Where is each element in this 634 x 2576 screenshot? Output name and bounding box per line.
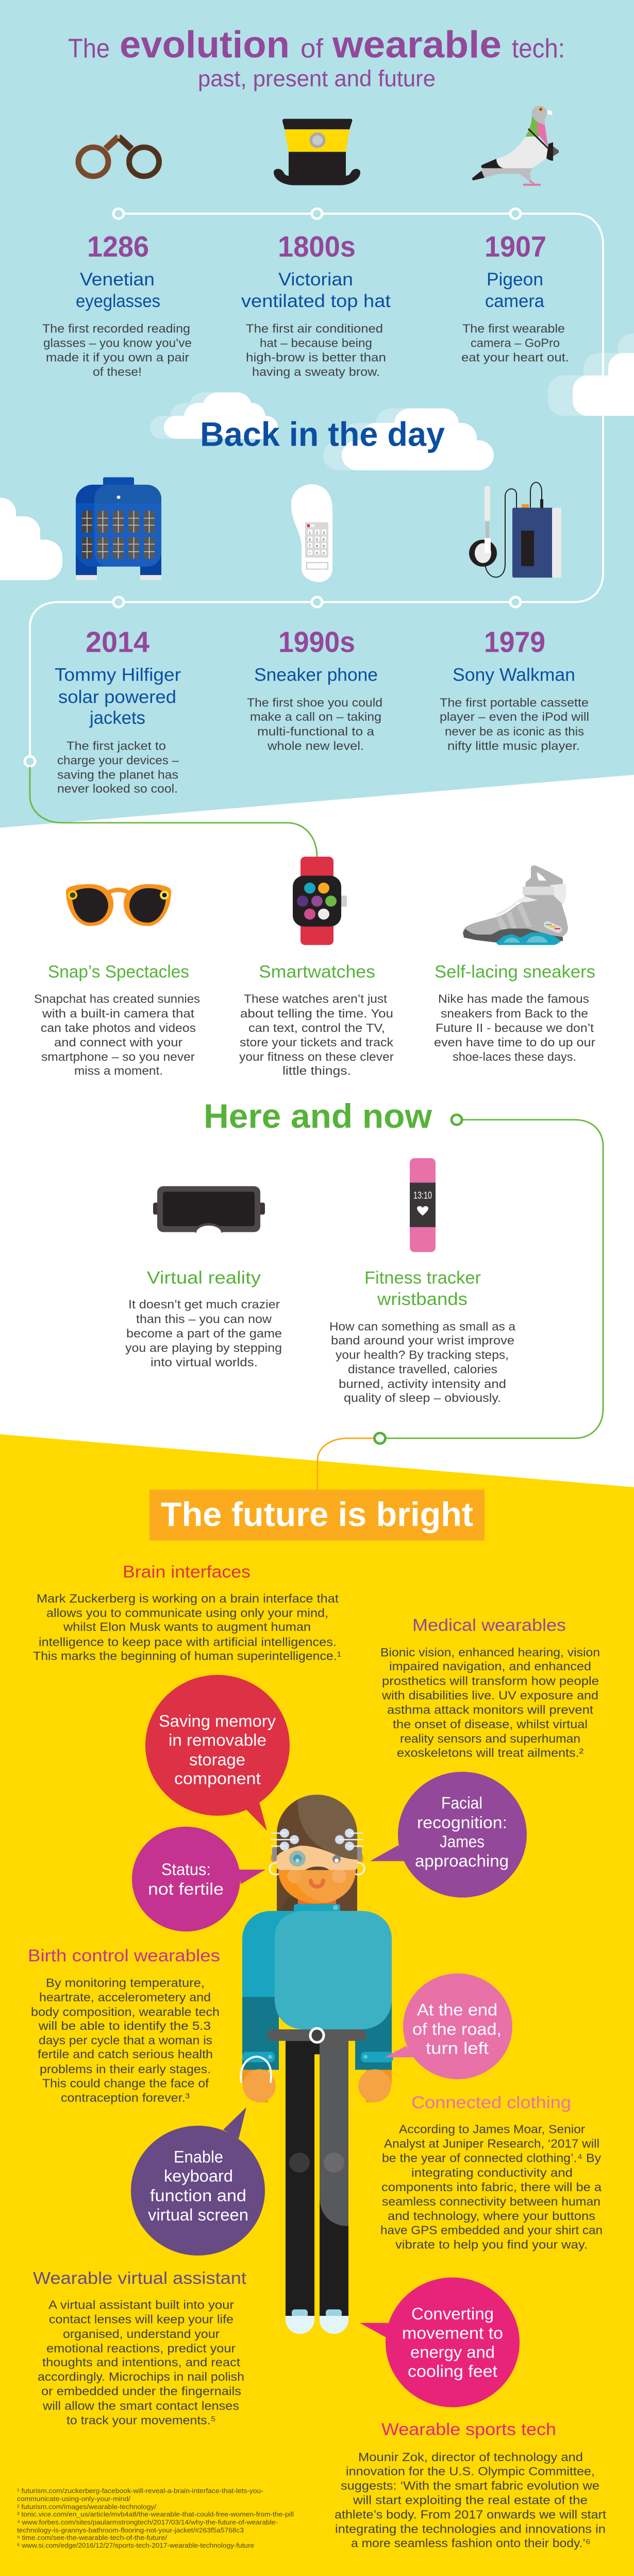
present item: Fitness tracker wristbands: wristbands [377,1290,468,1309]
speech bubble: facial recognition [370,1772,527,1897]
present item: Fitness tracker wristbands [329,1268,516,1405]
text block: Connected clothing: have GPS embedded and your shirt can [380,2224,603,2238]
timeline item: 1990s Sneaker phone: make a call on – taking [250,711,381,724]
timeline item: 1907 Pigeon camera [461,231,569,364]
text block: Wearable sports tech: suggests: ‘With the smart fabric evolution we [341,2480,599,2493]
present item: Fitness tracker wristbands: distance travelled, calories [348,1363,497,1377]
footnotes: technology-is-grannys-bathroom-flooring-not-your-jacket/#263f5a5768c3 [17,2527,244,2534]
speech bubble: facial recognition: Facial [441,1794,482,1812]
footnotes: ⁴ www.forbes.com/sites/paularmstrongtech/2017/03/14/why-the-future-of-wearable- [17,2518,278,2526]
present item: Fitness tracker wristbands: Fitness tracker [364,1268,481,1287]
timeline item: 1979 Sony Walkman: never be as iconic as this [445,725,584,738]
speech bubble: turn left: of the road, [412,2020,502,2039]
icon: Venetian eyeglasses [78,136,159,176]
present item: Virtual reality [125,1268,282,1369]
text block: Birth control wearables: will be able to identify the 5.3 [38,2020,211,2033]
timeline item: 1990s Sneaker phone: 1990s [278,626,355,658]
present item: Virtual reality: become a part of the game [126,1327,282,1341]
timeline item: 2014 Tommy Hilfiger jackets: charge your devices – [57,754,179,767]
text block: Medical wearables: Bionic vision, enhanced hearing, vision [380,1646,600,1659]
timeline item: 1800s Victorian ventilated top hat: The first air conditioned [246,323,383,335]
speech bubble: turn left: At the end [417,2001,497,2019]
timeline item: 1286 Venetian eyeglasses: glasses – you know you’ve [43,337,192,350]
hair [277,1795,357,1911]
speech bubble: keyboard function: function and [150,2187,246,2205]
timeline item: 1800s Victorian ventilated top hat [241,231,391,379]
heading: Here and now: Here and now [204,1097,432,1136]
icon: sneaker phone [291,484,332,582]
speech bubble: converting movement: cooling feet [408,2362,497,2380]
timeline item: 1286 Venetian eyeglasses: eyeglasses [76,291,160,311]
text block: Wearable virtual assistant [33,2269,247,2427]
text block: Wearable virtual assistant: A virtual assistant built into your [48,2299,234,2312]
text block: Wearable sports tech: will start exploiting the real estate of the [353,2494,588,2507]
text block: Wearable virtual assistant: will allow the smart contact lenses [42,2400,239,2413]
icon: Sony Walkman [469,482,561,578]
text block: Connected clothing: seamless connectivity between human [382,2195,600,2209]
icon: sneaker phone: 8 [316,545,318,548]
present item: Virtual reality: It doesn’t get much crazier [128,1298,280,1312]
present item: Smartwatches: your fitness on these clever [239,1050,394,1064]
present item: Snap's Spectacles: can take photos and videos [41,1022,196,1035]
timeline item: 1979 Sony Walkman: Sony Walkman [453,665,575,685]
text block: Wearable virtual assistant: to track your movements.⁵ [66,2414,216,2427]
present item: Self-lacing sneakers: Self-lacing sneakers [435,962,595,981]
text block: Medical wearables: with disabilities live. UV exposure and [381,1689,598,1702]
timeline item: 1979 Sony Walkman: player – even the iPod will [440,711,589,724]
green timeline: present [386,1115,603,1438]
present item: Smartwatches: can text, control the TV, [248,1022,385,1035]
text block: Birth control wearables: Birth control wearables [28,1947,220,1965]
timeline item: 1800s Victorian ventilated top hat: 1800s [278,231,356,263]
present item: Snap's Spectacles: and connect with your [54,1036,182,1049]
present item: Virtual reality: into virtual worlds. [151,1356,258,1369]
timeline item: 2014 Tommy Hilfiger jackets: saving the planet has [57,769,178,782]
present item: Self-lacing sneakers: sneakers from Back to the [441,1007,588,1021]
present item: Fitness tracker wristbands: quality of sleep – obviously. [344,1392,501,1405]
background: sky blue past section [0,0,634,828]
speech bubble: converting movement: movement to [402,2324,503,2343]
timeline item: 1979 Sony Walkman: nifty little music player. [447,740,580,753]
icon: solar powered jacket [76,477,161,580]
timeline item: 1800s Victorian ventilated top hat: having a sweaty brow. [252,366,380,379]
ears, earpieces and earrings [270,1847,364,1875]
orange timeline: present to future [318,1438,374,1489]
text block: Wearable sports tech: a more seamless fashion onto their body.’⁶ [351,2537,591,2550]
icon: fitness tracker wristband: 13:10 [413,1190,432,1201]
text block: Brain interfaces: This marks the beginning of human superintelligence.¹ [33,1650,341,1663]
timeline item: 1979 Sony Walkman: The first portable cassette [440,697,589,710]
text block: Wearable sports tech: athlete’s body. From 2017 onwards we will start [335,2509,606,2521]
icon: sneaker phone: * [309,552,311,555]
icon: fitness tracker wristband [410,1158,436,1252]
timeline item: 2014 Tommy Hilfiger jackets: solar powered [58,687,176,707]
icon: Snap's Spectacles [66,884,171,926]
text block: Medical wearables [380,1616,600,1760]
text block: Connected clothing: components into fabric, there will be a [381,2181,602,2194]
cloud: right of first row [548,333,634,416]
present item: Self-lacing sneakers: even have time to do up our [434,1036,595,1049]
timeline item: 1907 Pigeon camera: The first wearable [462,323,565,335]
timeline item: 1990s Sneaker phone: The first shoe you could [247,697,382,710]
cloud: behind heading right [323,409,494,470]
present item: Virtual reality: you are playing by stepping [125,1342,282,1355]
timeline item: 2014 Tommy Hilfiger jackets: 2014 [86,626,149,658]
text block: Connected clothing: Analyst at Juniper Research, ‘2017 will [384,2138,599,2151]
cloud: behind heading left [150,393,278,439]
icon: sneaker phone: 9 [323,545,325,548]
speech bubble: keyboard function: keyboard [164,2167,233,2185]
text block: Birth control wearables [28,1947,220,2105]
trousers [286,2041,348,2316]
speech bubble: status not fertile: not fertile [148,1880,224,1898]
text block: Birth control wearables: body composition, wearable tech [31,2006,220,2019]
present item: Fitness tracker wristbands: How can something as small as a [329,1320,516,1333]
present item: Smartwatches [239,962,394,1078]
present item: Smartwatches: store your tickets and track [240,1036,393,1049]
hands with bracelet [241,2057,392,2102]
speech bubble: status not fertile: Status: [161,1860,211,1878]
timeline item: 1907 Pigeon camera: camera – GoPro [471,337,560,350]
cooling shoes [286,2310,348,2334]
heading: Back in the day: Back in the day [200,415,445,453]
footnotes [17,2487,294,2549]
speech bubble: converting movement: Converting [411,2304,494,2323]
timeline item: 2014 Tommy Hilfiger jackets: jackets [89,708,145,728]
icon: sneaker phone: 6 [323,538,325,541]
green timeline: past to present [30,767,317,857]
text block: Medical wearables: impaired navigation, and enhanced [389,1660,591,1673]
speech bubble: saving memory: storage [189,1751,245,1769]
icon: sneaker phone: 1 [309,531,311,535]
text block: Brain interfaces: Mark Zuckerberg is working on a brain interface that [37,1592,339,1605]
present item: Snap's Spectacles: smartphone – so you never [41,1050,195,1064]
icon: smartwatch [293,857,347,945]
text block: Connected clothing [380,2094,603,2251]
cloud: left edge [0,498,62,580]
footnotes: ¹ futurism.com/zuckerberg-facebook-will-reveal-a-brain-interface-that-lets-you- [17,2487,263,2495]
text block: Wearable virtual assistant: accordingly. Microchips in nail polish [38,2370,244,2384]
speech bubble: status not fertile [132,1827,265,1931]
timeline item: 2014 Tommy Hilfiger jackets: Tommy Hilfiger [55,665,181,685]
timeline item: 1907 Pigeon camera: Pigeon [487,269,543,290]
speech bubble: facial recognition: recognition: [417,1814,507,1832]
present item: Self-lacing sneakers [434,962,595,1064]
text block: Connected clothing: integrating conductivity and [411,2166,573,2180]
text block: Brain interfaces: allows you to communicate using only your mind, [46,1607,328,1620]
timeline item: 1979 Sony Walkman: 1979 [484,626,545,658]
text block: Birth control wearables: heartrate, accelerometery and [39,1991,211,2005]
timeline node: present to future [374,1433,386,1444]
speech bubble: facial recognition: James [440,1833,485,1851]
text block: Connected clothing: vibrate to help you find your way. [395,2239,588,2251]
footnotes: communicate-using-only-your-mind/ [17,2495,130,2503]
timeline item: 1286 Venetian eyeglasses: The first recorded reading [42,323,190,335]
timeline item: 2014 Tommy Hilfiger jackets: The first jacket to [66,740,166,753]
footnotes: ⁵ time.com/see-the-wearable-tech-of-the-future/ [17,2534,167,2541]
icon: VR headset [153,1186,265,1244]
speech bubble: saving memory: in removable [169,1731,266,1749]
present item: Smartwatches: These watches aren’t just [244,993,387,1006]
icon: sneaker phone: 3 [323,531,325,535]
present item: Self-lacing sneakers: shoe-laces these days. [453,1050,576,1064]
present item: Virtual reality: than this – you can now [136,1313,272,1326]
timeline item: 1286 Venetian eyeglasses: of these! [93,366,142,379]
timeline item: 1800s Victorian ventilated top hat: Victorian [278,269,353,290]
timeline item: 1286 Venetian eyeglasses: Venetian [80,269,155,290]
timeline item: 2014 Tommy Hilfiger jackets: never looked so cool. [57,783,178,796]
timeline item: 1907 Pigeon camera: eat your heart out. [461,351,569,364]
present item: Smartwatches: little things. [282,1065,351,1078]
speech bubble: converting movement [360,2278,520,2407]
text block: Birth control wearables: days per cycle that a woman is [39,2034,212,2047]
timeline item: 1907 Pigeon camera: camera [485,291,544,311]
present item: Fitness tracker wristbands: your health? By tracking steps, [336,1349,509,1362]
heading: The future is bright: The future is bright [161,1496,473,1534]
timeline item: 1990s Sneaker phone: Sneaker phone [254,665,378,685]
title: evolution [120,23,290,65]
present item: Snap's Spectacles [34,962,200,1078]
timeline item: 1286 Venetian eyeglasses [42,231,192,379]
present item: Snap's Spectacles: miss a moment. [74,1065,163,1078]
title: of [301,33,323,63]
speech bubble: saving memory [145,1675,290,1831]
icon: self-lacing sneaker [463,866,568,945]
icon: sneaker phone: 5 [316,538,318,541]
speech bubble: saving memory: Saving memory [159,1712,276,1731]
text block: Medical wearables: Medical wearables [412,1616,566,1635]
text block: Medical wearables: asthma attack monitors will prevent [387,1704,593,1717]
footnotes: ² futurism.com/images/wearable-technology/ [17,2503,156,2511]
present item: Self-lacing sneakers: Nike has made the famous [438,993,589,1006]
speech bubble: facial recognition: approaching [415,1852,509,1870]
jumper [242,1904,393,2070]
text block: Connected clothing: According to James Moar, Senior [399,2123,585,2136]
title: The [68,33,110,63]
icon: sneaker phone: 4 [309,538,311,541]
text block: Wearable sports tech: Mounir Zok, director of technology and [358,2451,583,2464]
text block: Brain interfaces: Brain interfaces [123,1563,251,1582]
text block: Wearable sports tech: Wearable sports tech [381,2420,556,2439]
face with visor [277,1845,357,1906]
speech bubble: converting movement: energy and [410,2343,495,2361]
timeline item: 1800s Victorian ventilated top hat: high-brow is better than [246,351,386,364]
icon: sneaker phone: 7 [309,545,311,548]
belt with buckle [267,2028,366,2042]
title [68,23,565,91]
title: tech: [512,33,565,63]
timeline item: 1990s Sneaker phone [247,626,382,753]
icon: sneaker phone: # [323,552,325,555]
speech bubble: keyboard function: virtual screen [148,2206,248,2224]
text block: Connected clothing: be the year of connected clothing’.⁴ By [382,2152,601,2165]
text block: Connected clothing: Connected clothing [411,2094,571,2112]
text block: Medical wearables: reality sensors and superhuman [400,1733,580,1746]
text block: Wearable sports tech [335,2420,606,2550]
present item: Virtual reality: Virtual reality [147,1268,261,1287]
title: past, present and future [198,65,436,91]
text block: Birth control wearables: fertile and catch serious health [38,2048,213,2061]
text block: Birth control wearables: By monitoring temperature, [46,1977,205,1990]
text block: Wearable virtual assistant: emotional reactions, predict your [46,2342,236,2355]
text block: Birth control wearables: This could change the face of [42,2077,209,2090]
speech bubble: keyboard function: Enable [174,2148,223,2166]
timeline item: 1800s Victorian ventilated top hat: hat – because being [260,337,372,350]
timeline item: 1907 Pigeon camera: 1907 [485,231,546,263]
white timeline: past [25,209,603,766]
present item: Self-lacing sneakers: Future II - because we don’t [436,1022,594,1035]
icon: sneaker phone: 0 [316,552,318,555]
text block: Medical wearables: exoskeletons will treat ailments.² [397,1747,583,1760]
present item: Smartwatches: about telling the time. You [240,1007,393,1021]
text block: Wearable sports tech: integrating the technologies and innovations in [335,2523,606,2536]
text block: Birth control wearables: contraception forever.³ [61,2092,190,2105]
present item: Smartwatches: Smartwatches [259,962,375,981]
text block: Wearable virtual assistant: contact lenses will keep your life [49,2313,233,2327]
present item: Snap's Spectacles: Snapchat has created sunnies [34,993,200,1006]
text block: Wearable virtual assistant: thoughts and intentions, and react [42,2356,240,2369]
timeline item: 1990s Sneaker phone: multi-functional to a [257,725,375,738]
timeline item: 2014 Tommy Hilfiger jackets [55,626,181,796]
illustration: person wearing future tech [241,1795,393,2334]
brain interface pins [271,1828,363,1851]
background: yellow future section [0,1434,634,2576]
text block: Medical wearables: the onset of disease, whilst virtual [393,1718,588,1732]
text block: Birth control wearables: problems in their early stages. [40,2063,211,2076]
present item: Fitness tracker wristbands: band around your wrist improve [331,1334,514,1347]
text block: Wearable virtual assistant: or embedded under the fingernails [41,2385,241,2398]
speech bubble: turn left: turn left [426,2039,489,2057]
icon: pigeon camera [472,106,559,185]
timeline item: 1286 Venetian eyeglasses: 1286 [87,231,149,263]
text block: Medical wearables: prosthetics will transform how people [382,1675,599,1688]
text block: Brain interfaces [33,1563,341,1663]
text block: Connected clothing: and technology, where your buttons [388,2210,595,2223]
timeline item: 1979 Sony Walkman [440,626,589,753]
timeline item: 1800s Victorian ventilated top hat: ventilated top hat [241,291,391,311]
icon: Victorian top hat [274,119,360,185]
timeline item: 1990s Sneaker phone: whole new level. [267,740,364,753]
present item: Snap's Spectacles: Snap’s Spectacles [48,962,189,981]
text block: Brain interfaces: intelligence to keep pace with artificial intelligences. [39,1636,337,1649]
present item: Snap's Spectacles: with a built-in camera that [42,1007,194,1021]
speech bubble: turn left [385,1973,512,2079]
text block: Wearable sports tech: innovation for the U.S. Olympic Committee, [346,2465,595,2478]
icon: sneaker phone: 2 [316,531,318,535]
timeline item: 1286 Venetian eyeglasses: made it if you own a pair [46,351,189,364]
title: wearable [332,23,502,65]
text block: Brain interfaces: whilst Elon Musk wants to augment human [63,1621,311,1634]
text block: Wearable virtual assistant: Wearable virtual assistant [33,2269,247,2288]
speech bubble: keyboard function [131,2107,265,2256]
footnotes: ⁶ www.si.com/edge/2016/12/27/sports-tech-2017-wearable-technology-future [17,2541,254,2549]
speech bubble: saving memory: component [174,1770,261,1788]
footnotes: ³ tonic.vice.com/en_us/article/mvb4a8/the-wearable-that-could-free-women-from-the-pill [17,2511,294,2518]
text block: Wearable virtual assistant: organised, understand your [63,2328,220,2341]
present item: Fitness tracker wristbands: burned, activity intensity and [339,1378,506,1391]
